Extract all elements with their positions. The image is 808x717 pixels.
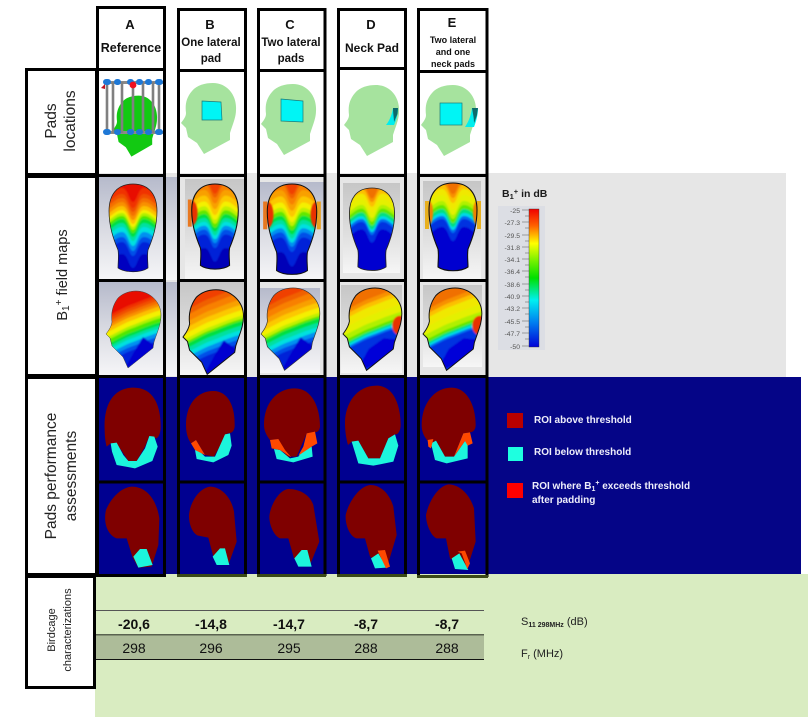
chart: field map B front	[188, 184, 239, 270]
label: resonance frequency: (MHz)	[530, 648, 563, 660]
chart: field map C front	[263, 184, 321, 275]
row: pads performance assessment maps	[99, 378, 485, 574]
panel: B1 field maps background band	[96, 173, 786, 377]
column E frame and header: Two lateral	[430, 35, 476, 45]
column B frame and header: B	[205, 17, 215, 32]
chart: field map D side	[342, 288, 402, 372]
label: S11 at 298 MHz: S	[521, 616, 528, 628]
chart: field map A front	[108, 184, 158, 272]
row header: B1+ field maps: +	[54, 299, 65, 305]
chart: field map B side	[182, 289, 244, 375]
icon: head with one lateral pad	[181, 83, 236, 154]
column A frame and header: A	[125, 17, 135, 32]
colour bar tick labels: -40.9	[504, 294, 520, 301]
column D frame and header: Neck Pad	[345, 41, 399, 55]
row header: Pads locations	[26, 70, 96, 174]
label: resonance frequency: F	[521, 648, 528, 660]
chart: field map D front	[349, 188, 395, 271]
icon: head with two lateral and one neck pads	[421, 85, 478, 156]
column C frame and header: C	[285, 17, 295, 32]
column E frame and header: and one	[436, 47, 470, 57]
row header: Birdcage characterizations: characterizations	[62, 588, 74, 672]
row: S11 values: -14,8	[195, 616, 227, 632]
label: S11 at 298 MHz: 11 298MHz	[528, 622, 564, 629]
legend item: ROI above threshold: ROI above threshold	[534, 415, 632, 426]
row: S11 values: -14,7	[273, 616, 305, 632]
icon: head with two lateral pads	[261, 84, 316, 155]
chart: field map E side	[422, 288, 482, 372]
chart: field map E front	[425, 182, 481, 272]
legend item: ROI where B1+ exceeds threshold after padding	[507, 480, 690, 506]
row: S11 values	[118, 616, 459, 632]
legend item: ROI below threshold: ROI below threshold	[534, 447, 631, 458]
legend item: ROI where B1+ exceeds threshold after padding: ROI where B	[532, 481, 591, 492]
label: resonance frequency: r	[528, 654, 531, 661]
row header: B1+ field maps: B	[55, 311, 71, 321]
row: resonance frequency values: 288	[354, 640, 378, 656]
column D frame and header: D	[366, 17, 376, 32]
legend: ROI categories	[507, 413, 690, 506]
row header: Pads locations: Pads	[43, 103, 60, 139]
colour bar tick labels: -29.5	[504, 233, 520, 240]
colour bar tick labels: -31.8	[504, 245, 520, 252]
row header: Pads performance assessments: assessments	[63, 431, 80, 521]
column C frame and header	[257, 10, 326, 577]
legend item: ROI below threshold	[508, 447, 631, 461]
row header: B1+ field maps: 1	[61, 305, 72, 311]
column A frame and header: Reference	[101, 41, 161, 55]
legend item: ROI where B1+ exceeds threshold after padding: 1	[591, 486, 595, 493]
table: birdcage characterizations	[95, 610, 588, 661]
column E frame and header: neck pads	[431, 59, 475, 69]
column A frame and header	[96, 8, 166, 577]
row header: Birdcage characterizations: Birdcage	[46, 608, 58, 652]
row header: Pads performance assessments: Pads performance	[43, 413, 60, 539]
colour bar tick labels: -45.5	[504, 319, 520, 326]
chart: field map A side	[106, 290, 162, 368]
column D frame and header	[337, 10, 407, 577]
colour bar tick labels: -25	[510, 208, 520, 215]
row: resonance frequency values	[122, 640, 459, 656]
column B frame and header: pad	[201, 53, 221, 65]
row: S11 values: -20,6	[118, 616, 150, 632]
column E frame and header: E	[448, 15, 457, 30]
heading: B1+ in dB: B	[502, 188, 510, 200]
column C frame and header: Two lateral	[261, 37, 321, 49]
row header: B1+ field maps	[26, 176, 96, 376]
row header: B1+ field maps: field maps	[55, 229, 71, 300]
colour bar tick labels: -34.1	[504, 257, 520, 264]
row header: Birdcage characterizations	[26, 576, 94, 688]
colour bar	[529, 209, 539, 347]
row: S11 values: -8,7	[435, 616, 459, 632]
row: resonance frequency values: 295	[277, 640, 301, 656]
chart: field map C side	[260, 288, 320, 371]
row header: Pads performance assessments	[26, 378, 96, 574]
row: pads locations head models	[101, 81, 478, 157]
colour bar tick labels: -36.4	[504, 269, 520, 276]
column C frame and header: pads	[278, 53, 304, 65]
legend item: ROI where B1+ exceeds threshold after padding: exceeds threshold	[599, 481, 690, 492]
chart: performance maps columns D and E	[345, 386, 476, 570]
icon: reference head inside birdcage coil	[101, 81, 163, 157]
chart: performance maps columns A to C	[105, 388, 320, 568]
heading: B1+ in dB: in dB	[518, 188, 548, 200]
row header: Pads locations: locations	[62, 90, 79, 152]
column B frame and header	[177, 10, 247, 577]
colour bar tick labels: -47.7	[504, 331, 520, 338]
colour bar tick labels: -38.6	[504, 282, 520, 289]
icon: head with neck pad	[344, 85, 399, 156]
row: resonance frequency values: 296	[199, 640, 223, 656]
legend: B1+ colour scale	[498, 187, 548, 351]
heading: B1+ in dB: 1	[510, 192, 514, 201]
column E frame and header	[417, 10, 488, 578]
colour bar tick labels: -27.3	[504, 220, 520, 227]
legend item: ROI where B1+ exceeds threshold after padding: after padding	[532, 495, 595, 506]
heading: B1+ in dB: +	[514, 187, 519, 196]
panel: birdcage characterization background band	[95, 574, 808, 717]
column B frame and header: One lateral	[181, 37, 241, 49]
panel: pads performance background band	[96, 377, 801, 574]
legend item: ROI where B1+ exceeds threshold after padding: +	[595, 480, 599, 487]
colour bar tick labels: -43.2	[504, 306, 520, 313]
row: resonance frequency values: 298	[122, 640, 146, 656]
colour bar tick labels: -50	[510, 344, 520, 351]
row: S11 values: -8,7	[354, 616, 378, 632]
legend item: ROI above threshold	[507, 413, 632, 428]
colour bar tick labels	[504, 208, 520, 351]
row: B1 field maps	[99, 177, 482, 376]
row: resonance frequency values: 288	[435, 640, 459, 656]
label: S11 at 298 MHz: (dB)	[564, 616, 588, 628]
